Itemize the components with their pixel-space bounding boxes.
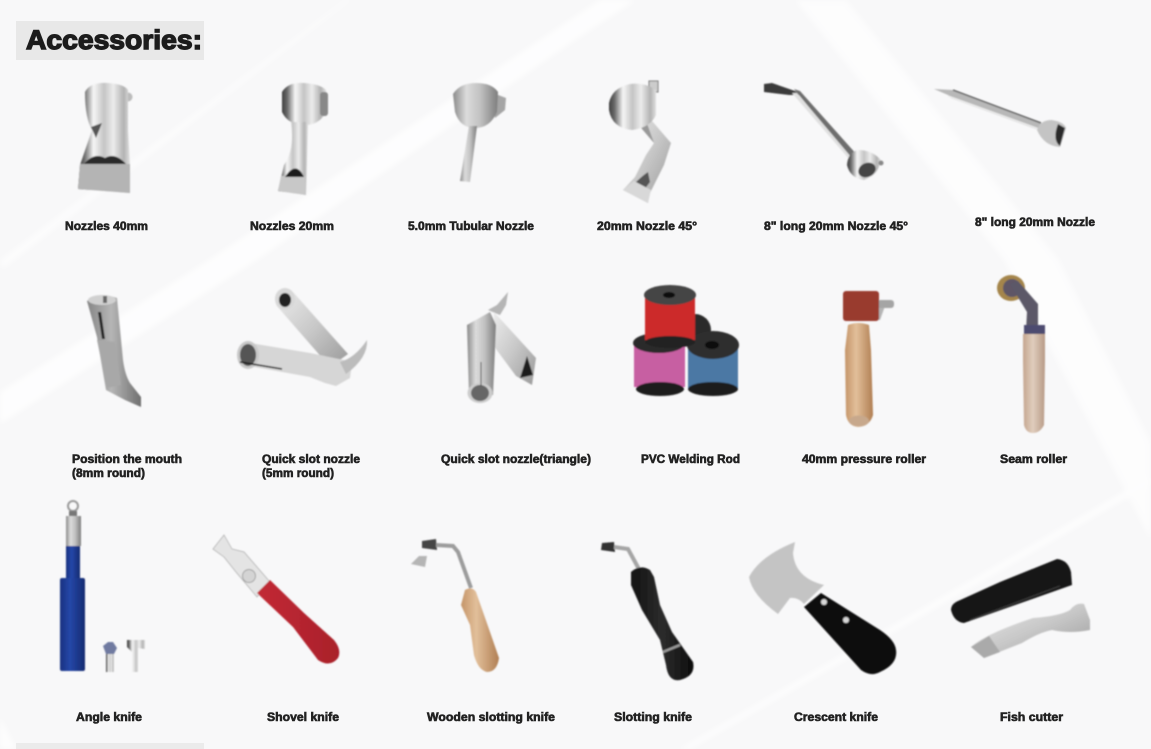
item: 8 inch long 20mm Nozzle xyxy=(934,89,1095,229)
label: PVC Welding Rod xyxy=(641,454,740,466)
item: Quick slot nozzle triangle xyxy=(441,292,591,466)
icon: slotting knife xyxy=(601,542,693,680)
label: Nozzles 40mm xyxy=(65,221,148,233)
item: Quick slot nozzle 5mm xyxy=(237,288,367,480)
icon: shovel knife xyxy=(213,535,339,664)
item: 20mm Nozzle 45 degrees xyxy=(597,81,697,233)
item: Crescent knife xyxy=(749,542,896,724)
label: Angle knife xyxy=(76,712,142,724)
icon: welding rod spools xyxy=(633,285,739,396)
label: Crescent knife xyxy=(794,712,878,724)
icon: quick slot nozzle xyxy=(237,288,367,386)
icon: wooden slotting knife xyxy=(411,539,499,672)
label: Wooden slotting knife xyxy=(427,712,555,724)
label: Quick slot nozzle(triangle) xyxy=(441,454,591,466)
label: 8" long 20mm Nozzle 45° xyxy=(764,221,908,233)
icon: long angled nozzle xyxy=(764,83,884,180)
heading: Accessories xyxy=(16,21,204,60)
item: Angle knife xyxy=(60,501,145,724)
item: PVC Welding Rod xyxy=(633,285,740,466)
item: Nozzles 40mm xyxy=(65,83,148,233)
label line 2: (5mm round) xyxy=(262,468,334,480)
item: Fish cutter xyxy=(951,559,1090,724)
footer grey bar xyxy=(16,743,204,749)
item: Position the mouth xyxy=(72,295,182,480)
icon: seam roller xyxy=(997,275,1045,433)
icon: position nozzle xyxy=(87,295,141,407)
label: Quick slot nozzle xyxy=(262,454,360,466)
label: Fish cutter xyxy=(1000,712,1064,724)
label line 2: (8mm round) xyxy=(72,468,145,480)
label: 5.0mm Tubular Nozzle xyxy=(408,221,534,233)
item: Slotting knife xyxy=(601,542,693,724)
icon: pressure roller xyxy=(843,291,894,427)
item: Shovel knife xyxy=(213,535,339,724)
icon: angle knife and blades xyxy=(60,501,145,672)
label: 40mm pressure roller xyxy=(802,454,927,466)
label: Position the mouth xyxy=(72,454,182,466)
heading: Accessories: Accessories: xyxy=(26,25,202,55)
item: 40mm pressure roller xyxy=(802,291,927,466)
icon: fish cutter and sheath xyxy=(951,559,1090,658)
item: Seam roller xyxy=(997,275,1068,466)
label: Shovel knife xyxy=(267,712,339,724)
icon: crescent knife xyxy=(749,542,896,674)
item: Nozzles 20mm xyxy=(250,83,334,233)
icon: tubular nozzle xyxy=(453,83,506,182)
item: Wooden slotting knife xyxy=(411,539,555,724)
icon: 20mm nozzle xyxy=(278,83,328,195)
icon: triangle slot nozzle xyxy=(467,292,536,403)
label: 8" long 20mm Nozzle xyxy=(975,217,1095,229)
icon: angled nozzle xyxy=(609,81,671,203)
item: 8 inch long 20mm Nozzle 45 degrees xyxy=(764,83,908,233)
label: Seam roller xyxy=(1000,454,1068,466)
icon: 40mm nozzle xyxy=(78,83,132,193)
label: Slotting knife xyxy=(614,712,692,724)
label: Nozzles 20mm xyxy=(250,221,334,233)
icon: long straight nozzle xyxy=(934,89,1066,147)
item: 5.0mm Tubular Nozzle xyxy=(408,83,534,233)
label: 20mm Nozzle 45° xyxy=(597,221,697,233)
